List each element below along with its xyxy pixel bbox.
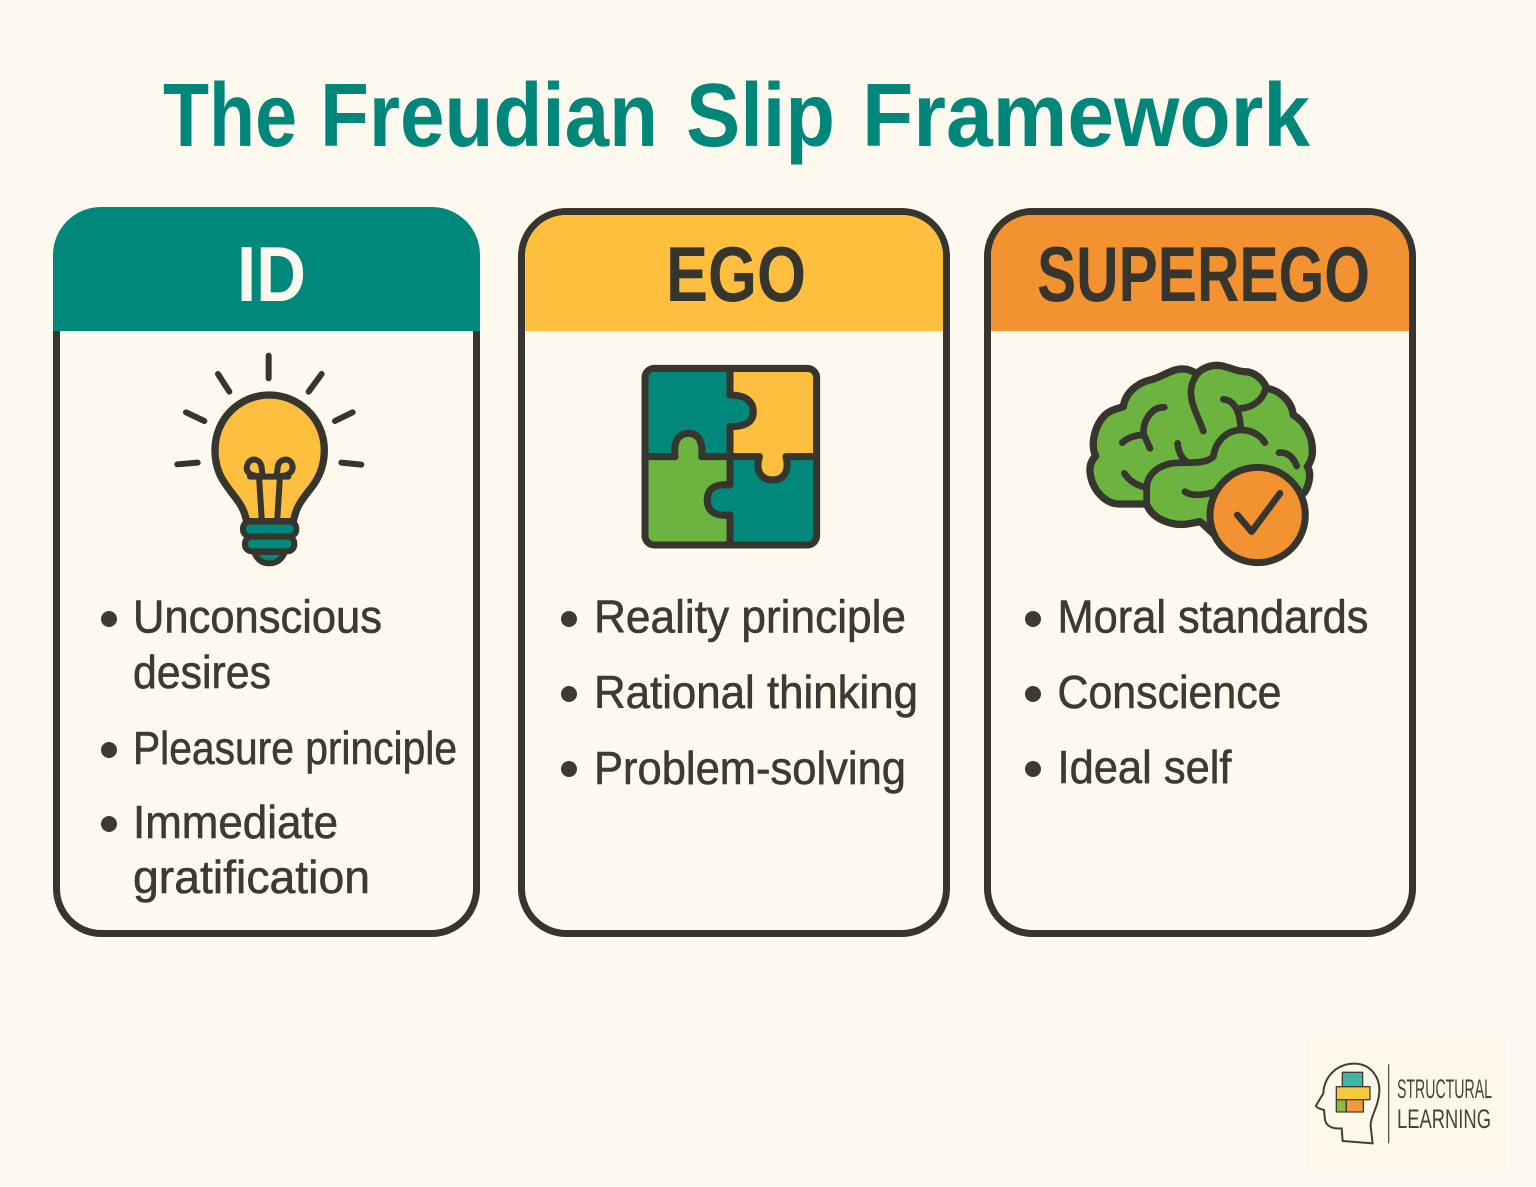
header: id: [53, 207, 480, 331]
bullet list: superego: Conscience: [1058, 666, 1282, 718]
logo wordmark: [1397, 1074, 1492, 1134]
title: The: [163, 66, 297, 166]
bullet list: id: Immediate: [133, 796, 338, 848]
bullet list: id: Unconscious: [133, 590, 382, 642]
bullet list: ego: [561, 590, 918, 794]
bullet list: ego: Reality principle: [594, 590, 906, 642]
logo: structural learning: [1307, 1040, 1506, 1172]
bullet list: superego: Ideal self: [1058, 741, 1232, 793]
title: [163, 66, 1311, 166]
panel: ego: [522, 212, 946, 934]
bullet list: id: [101, 590, 457, 903]
header: superego: [991, 215, 1409, 331]
header: ego: EGO: [666, 230, 806, 318]
bullet list: id: gratification: [133, 851, 370, 903]
panel: id: [53, 207, 480, 934]
header: superego: SUPEREGO: [1037, 230, 1370, 318]
panel: superego: [988, 212, 1412, 934]
title: Slip: [686, 66, 835, 166]
icon: brain with check: [1090, 365, 1312, 563]
bullet list: superego: [1025, 590, 1368, 793]
title: Freudian: [320, 66, 658, 166]
icon: head with blocks: [1316, 1064, 1389, 1143]
logo wordmark: LEARNING: [1397, 1104, 1491, 1134]
bullet list: ego: Problem-solving: [594, 742, 906, 794]
bullet list: ego: Rational thinking: [594, 666, 918, 718]
icon: light bulb: [177, 356, 361, 563]
bullet list: superego: Moral standards: [1058, 590, 1368, 642]
header: id: ID: [237, 230, 306, 318]
bullet list: id: desires: [133, 646, 271, 698]
title: Framework: [862, 66, 1311, 166]
bullet list: id: Pleasure principle: [133, 722, 457, 774]
icon: puzzle: [645, 368, 817, 545]
header: ego: [525, 215, 943, 331]
